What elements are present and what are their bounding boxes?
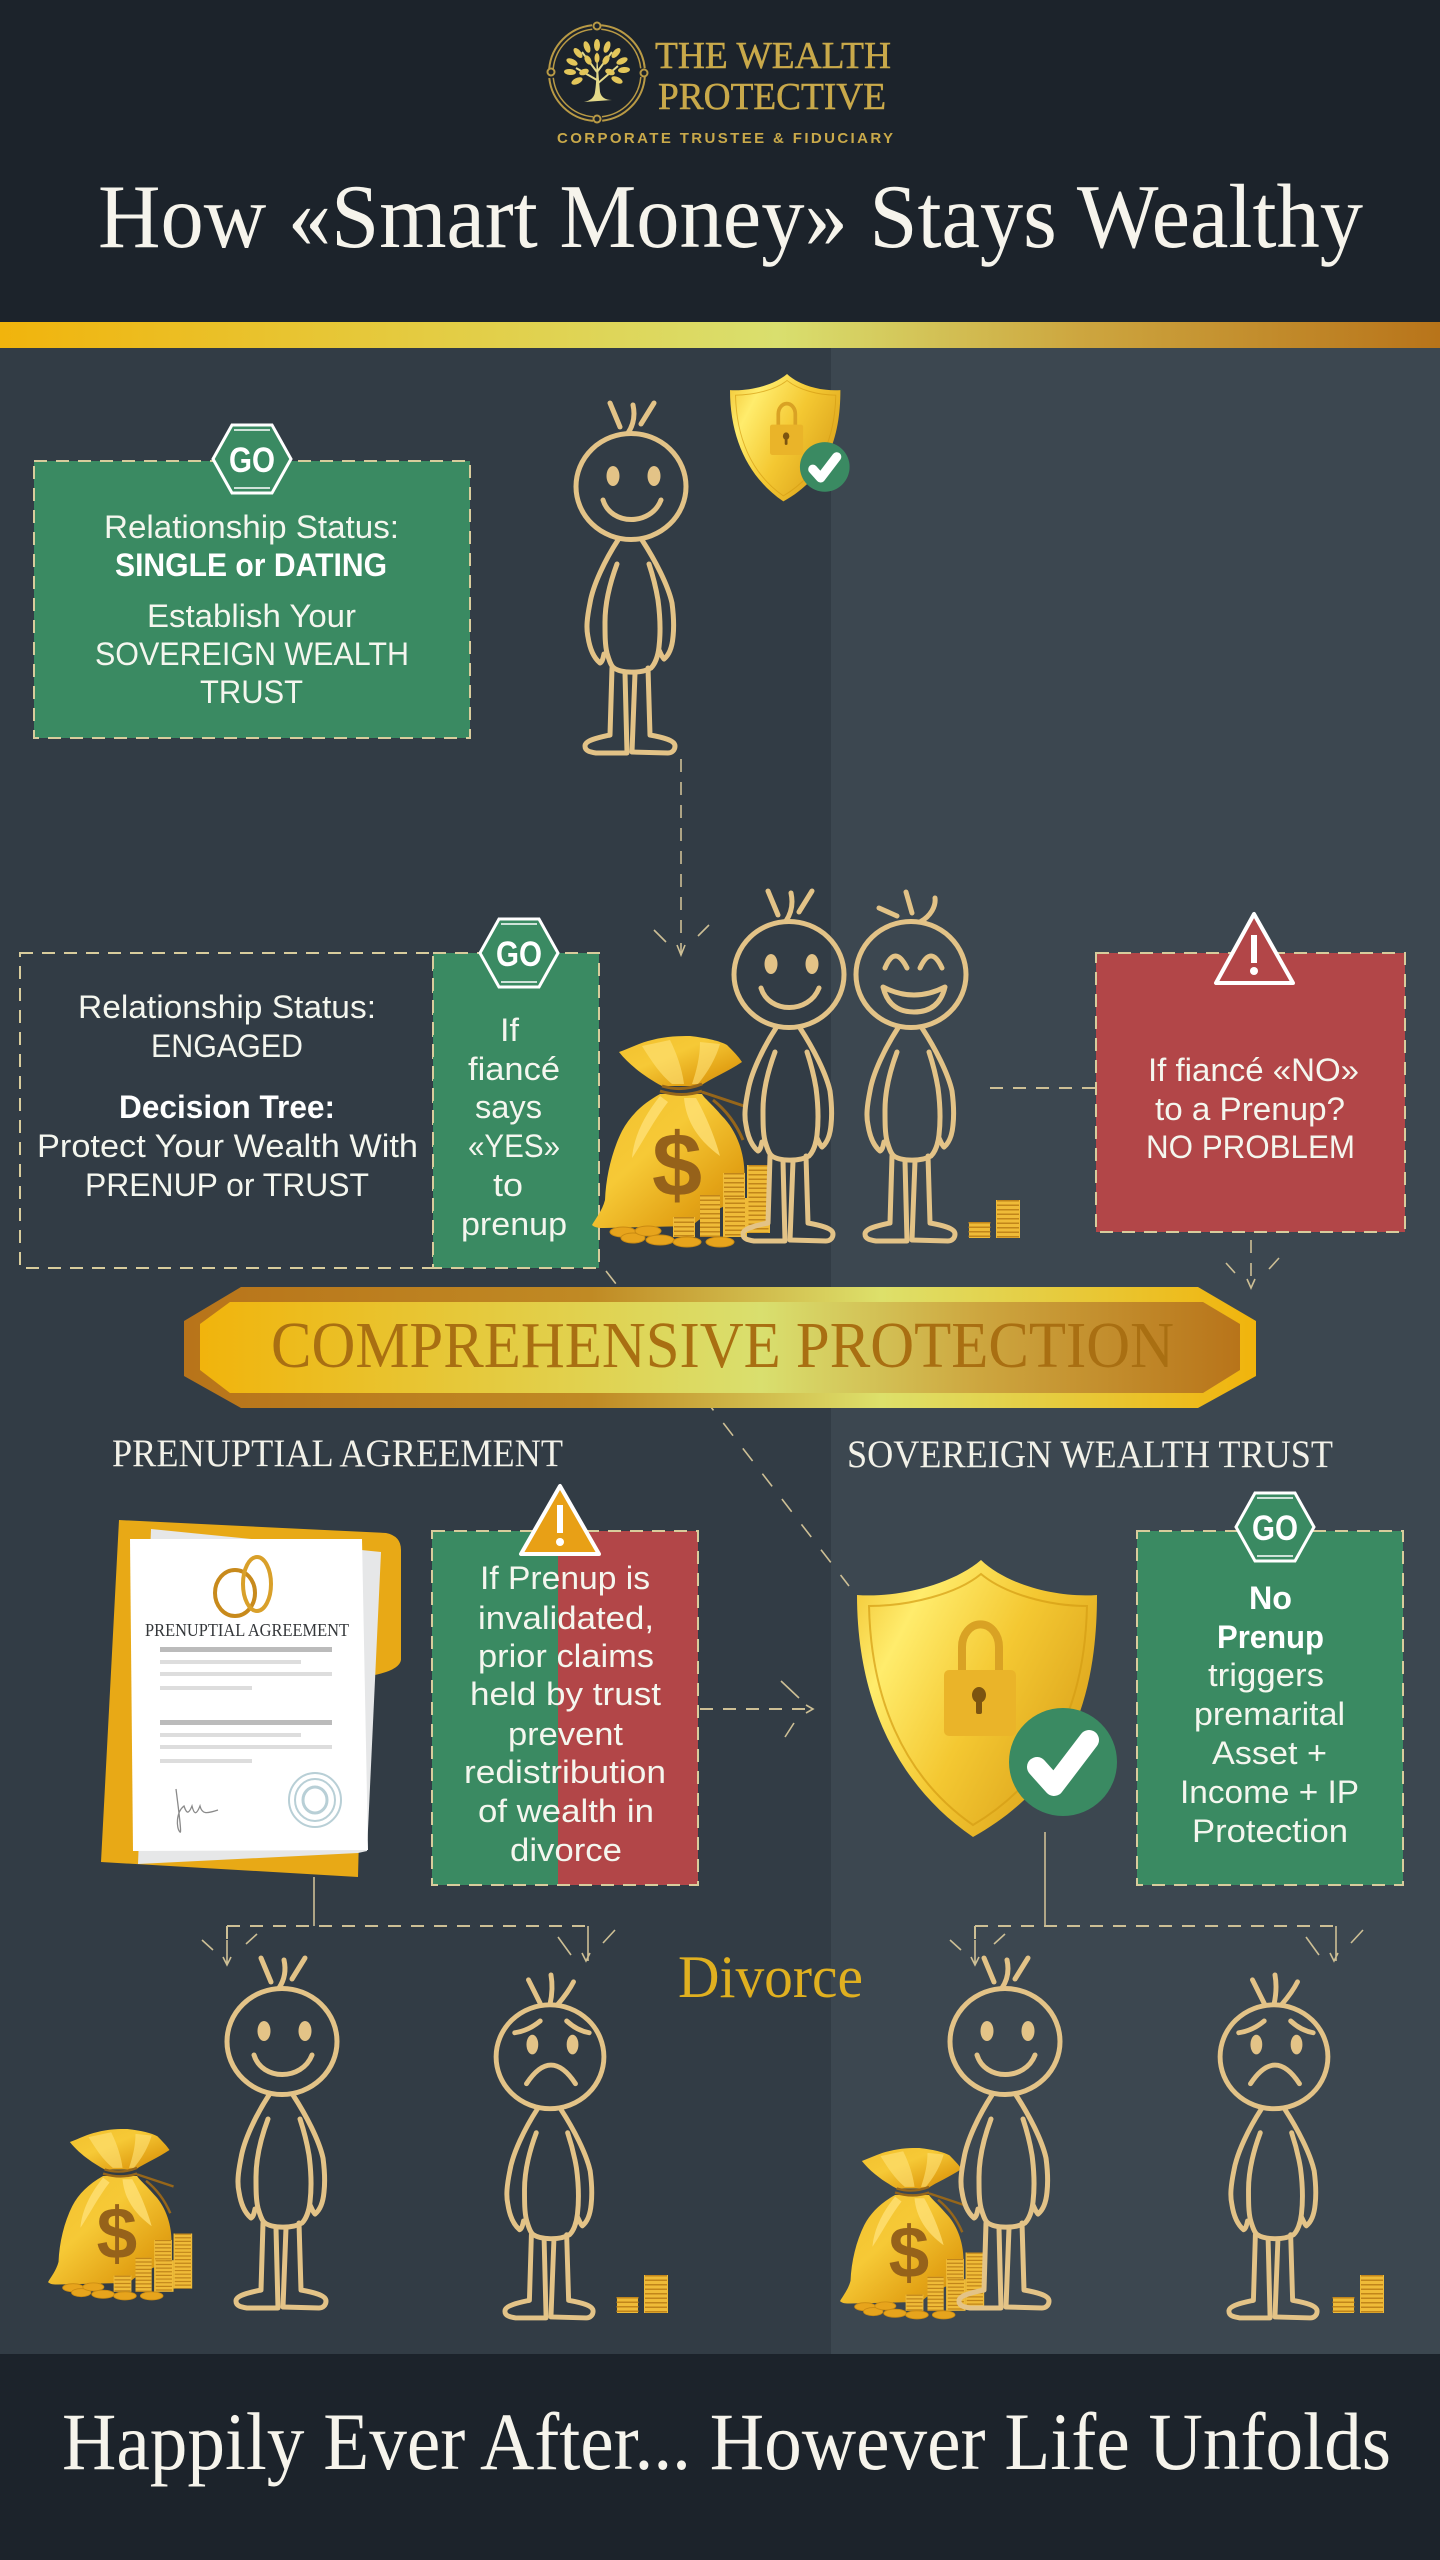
connector: single figure to couple bbox=[654, 759, 709, 955]
text: relationship status single: Establish Your bbox=[147, 598, 356, 634]
badge: GO bbox=[480, 919, 558, 987]
text: prenup invalidated: of wealth in bbox=[478, 1793, 654, 1829]
text: prenup invalidated: prior claims bbox=[478, 1638, 654, 1674]
connector: couple to red box bbox=[990, 1087, 1096, 1089]
back sheets bbox=[138, 1529, 381, 1864]
seal bbox=[289, 1773, 341, 1827]
heading: prenuptial agreement: PRENUPTIAL AGREEMENT bbox=[112, 1432, 563, 1475]
heading: sovereign wealth trust: SOVEREIGN WEALTH TRUST bbox=[847, 1433, 1333, 1476]
figure: sad spouse trust side bbox=[1220, 1975, 1328, 2318]
logo bbox=[548, 22, 893, 147]
panel: engaged decision tree bbox=[20, 953, 433, 1268]
connector: prenup tree bbox=[202, 1877, 615, 1965]
text: no prenup: triggers bbox=[1208, 1657, 1324, 1693]
logo wordmark: PROTECTIVE bbox=[658, 76, 886, 118]
wedding rings bbox=[215, 1557, 271, 1616]
main panel: right side bbox=[831, 348, 1440, 2354]
icon: orange warning triangle bbox=[521, 1486, 599, 1554]
figure: single happy person bbox=[576, 403, 686, 753]
figure: engaged laughing person bbox=[856, 892, 966, 1241]
connector: trust tree bbox=[950, 1832, 1363, 1965]
icon: money bag prenup side bbox=[48, 2129, 192, 2300]
text: fiance no: NO PROBLEM bbox=[1146, 1129, 1355, 1165]
text: fiance no: to a Prenup? bbox=[1155, 1091, 1345, 1127]
panel: engaged decision tree: PRENUP or TRUST bbox=[85, 1167, 369, 1203]
text: no prenup: Income + IP bbox=[1180, 1774, 1359, 1810]
icon: money bag with coins bbox=[592, 1036, 770, 1247]
text: prenup invalidated: invalidated, bbox=[478, 1600, 654, 1636]
heading: divorce: Divorce bbox=[678, 1944, 863, 2010]
text: fiance yes: to bbox=[493, 1167, 523, 1203]
text: fiance yes: fiancé bbox=[468, 1051, 560, 1087]
panel: engaged decision tree: Relationship Status: bbox=[78, 989, 376, 1025]
text: prenup invalidated: prevent bbox=[508, 1716, 623, 1752]
text: fiance yes: «YES» bbox=[468, 1128, 560, 1164]
figure: happy spouse trust side bbox=[950, 1958, 1060, 2308]
document title: PRENUPTIAL AGREEMENT bbox=[145, 1620, 349, 1640]
icon: small coin stacks bbox=[969, 1200, 1020, 1238]
connector: red box to banner bbox=[1226, 1240, 1279, 1288]
logo wordmark bbox=[655, 35, 891, 118]
text: prenup invalidated: If Prenup is bbox=[480, 1560, 650, 1596]
banner: comprehensive protection: COMPREHENSIVE PROTECTION bbox=[271, 1309, 1174, 1382]
text: no prenup: Prenup bbox=[1217, 1619, 1324, 1655]
text: fiance yes: If bbox=[500, 1012, 519, 1048]
badge: GO bbox=[1236, 1493, 1314, 1561]
banner: comprehensive protection bbox=[184, 1287, 1256, 1408]
footer background bbox=[0, 2354, 1440, 2560]
text: fiance yes bbox=[461, 1012, 567, 1242]
panel: single or dating bbox=[34, 425, 470, 738]
front sheet bbox=[130, 1539, 368, 1851]
badge: GO bbox=[213, 425, 291, 493]
text: relationship status single bbox=[95, 509, 409, 710]
panel: engaged decision tree: Decision Tree: bbox=[119, 1089, 335, 1125]
text: prenup invalidated: divorce bbox=[510, 1832, 622, 1868]
text: fiance no bbox=[1146, 1052, 1359, 1165]
panel: prenup invalidated warning bbox=[432, 1486, 698, 1885]
icon: coins prenup side bbox=[617, 2275, 668, 2313]
panel: engaged decision tree: Protect Your Wealth With bbox=[37, 1128, 418, 1164]
text: fiance yes: says bbox=[475, 1089, 542, 1125]
folder bbox=[101, 1520, 401, 1877]
icon: money bag trust side bbox=[840, 2148, 984, 2319]
document text lines bbox=[160, 1647, 332, 1763]
text: fiance no: If fiancé «NO» bbox=[1148, 1052, 1359, 1088]
panel: fiance says no bbox=[1096, 914, 1405, 1232]
icon: coins trust side bbox=[1333, 2275, 1384, 2313]
text: no prenup bbox=[1180, 1580, 1359, 1849]
text: fiance yes: prenup bbox=[461, 1206, 567, 1242]
text: no prenup: Protection bbox=[1192, 1813, 1348, 1849]
text: prenup invalidated bbox=[464, 1560, 666, 1868]
icon: small gold shield with check bbox=[730, 374, 850, 501]
logo tagline: CORPORATE TRUSTEE & FIDUCIARY bbox=[557, 130, 893, 147]
panel: no prenup trust protection bbox=[1137, 1493, 1403, 1885]
panel: engaged decision tree: ENGAGED bbox=[151, 1028, 303, 1064]
figure: happy spouse prenup side bbox=[227, 1958, 337, 2308]
main panel: left side bbox=[0, 348, 831, 2354]
text: prenup invalidated: held by trust bbox=[470, 1676, 661, 1712]
text: no prenup: No bbox=[1249, 1580, 1292, 1616]
icon: large gold shield with check bbox=[857, 1560, 1117, 1837]
text: no prenup: Asset + bbox=[1212, 1735, 1327, 1771]
figure: sad spouse prenup side bbox=[496, 1975, 604, 2318]
text: prenup invalidated: redistribution bbox=[464, 1754, 666, 1790]
figure: engaged happy person bbox=[734, 891, 844, 1241]
text: relationship status single: SINGLE or DATING bbox=[115, 547, 387, 583]
signature bbox=[176, 1789, 218, 1832]
illustration: prenuptial agreement document bbox=[101, 1520, 401, 1877]
panel: fiance says yes bbox=[433, 919, 599, 1268]
text: relationship status single: SOVEREIGN WEALTH bbox=[95, 636, 409, 672]
connector: prenup to trust arrow bbox=[700, 1681, 813, 1737]
title: How «Smart Money» Stays Wealthy bbox=[98, 166, 1363, 267]
header background bbox=[0, 0, 1440, 322]
text: relationship status single: TRUST bbox=[200, 674, 303, 710]
logo wordmark: THE WEALTH bbox=[655, 35, 891, 77]
gold divider bar bbox=[0, 322, 1440, 348]
connector: diagonal from green box to shield bbox=[606, 1271, 849, 1586]
icon: red warning triangle bbox=[1216, 914, 1293, 983]
text: relationship status single: Relationship Status: bbox=[104, 509, 399, 545]
logo emblem: tree in ring bbox=[548, 22, 648, 122]
text: no prenup: premarital bbox=[1194, 1696, 1345, 1732]
